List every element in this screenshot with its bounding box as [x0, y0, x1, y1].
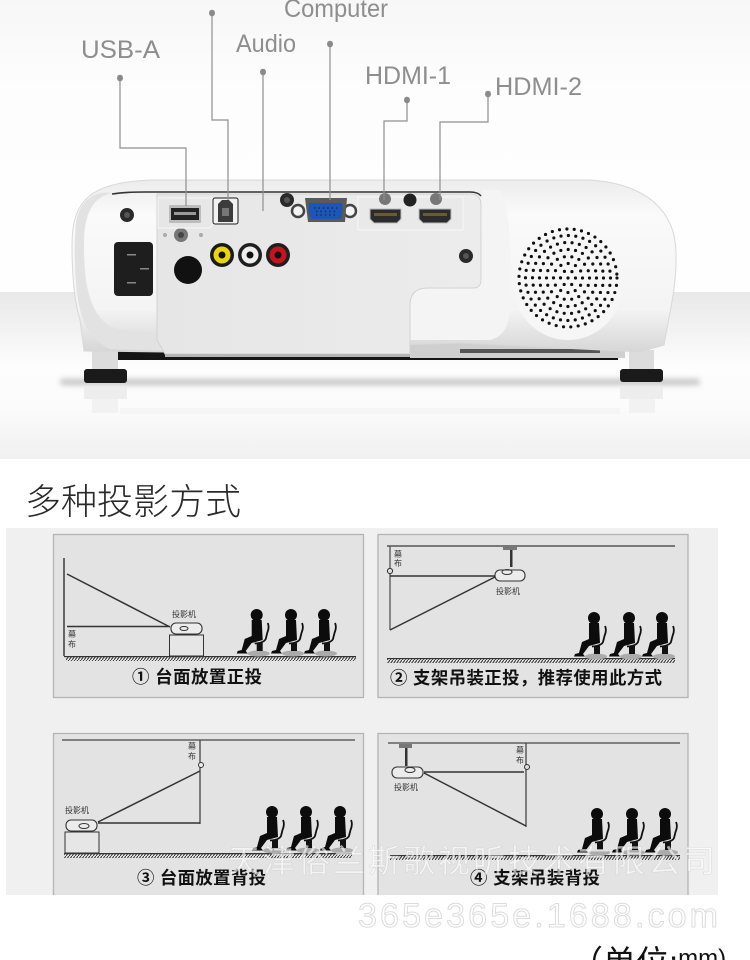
caption 1: ① 台面放置正投 — [132, 667, 262, 687]
screen label — [516, 745, 524, 765]
screen and beam — [64, 558, 170, 656]
leader lines — [117, 10, 491, 211]
label: USB-A: USB-A — [81, 36, 160, 64]
underside strip — [118, 340, 625, 360]
top edge shadow — [112, 192, 481, 196]
screen and beam — [424, 743, 530, 827]
projector feet — [84, 350, 663, 383]
USB-A port — [158, 198, 212, 228]
screen label: 幕 — [188, 741, 196, 751]
screen label: 幕 — [516, 745, 524, 755]
audience — [252, 806, 353, 854]
power inlet — [114, 242, 153, 296]
screws — [120, 193, 473, 263]
backdrop wall — [0, 0, 750, 292]
label: HDMI-1: HDMI-1 — [365, 62, 451, 90]
projector on table — [170, 609, 204, 656]
screen label: 布 — [188, 751, 196, 761]
screen label — [394, 549, 402, 568]
projector on table: 投影机 — [172, 609, 196, 619]
floor shadow — [60, 379, 700, 385]
floor reflection — [84, 387, 663, 414]
screen label — [188, 741, 196, 761]
screen label: 幕 — [68, 629, 76, 639]
audience — [574, 612, 675, 660]
diagram section background — [6, 528, 718, 895]
back plate — [157, 194, 481, 354]
VGA port — [292, 198, 356, 222]
projector — [72, 180, 676, 383]
side band — [410, 190, 510, 340]
projector on table — [65, 805, 99, 853]
ceiling projector: 投影机 — [496, 586, 520, 596]
heading: 多种投影方式 — [25, 481, 241, 522]
screen label: 布 — [68, 639, 76, 649]
ceiling — [62, 739, 355, 741]
left frame band — [75, 192, 165, 351]
screen label: 布 — [516, 755, 524, 765]
screen label: 布 — [394, 558, 402, 568]
ceiling projector: 投影机 — [394, 782, 418, 792]
speaker grille — [514, 229, 622, 340]
watermark: company name: 天津俗兰斯歌视听技术有限公司 — [228, 843, 715, 879]
caption 2: ② 支架吊装正投，推荐使用此方式 — [390, 668, 662, 688]
black plug — [174, 256, 202, 284]
ceiling — [387, 545, 675, 547]
projector on table: 投影机 — [65, 805, 89, 815]
screen and beam — [98, 740, 204, 824]
floor — [64, 853, 352, 858]
ceiling projector — [495, 546, 525, 596]
screen label — [68, 629, 76, 649]
HDMI ports — [358, 193, 463, 230]
screen label: 幕 — [394, 549, 402, 559]
floor — [390, 855, 680, 860]
bottom dark line — [165, 354, 410, 357]
audience — [237, 609, 337, 656]
ceiling projector — [392, 744, 423, 792]
panel 3: table rear projection — [54, 734, 364, 895]
panel 4: ceiling rear projection — [378, 734, 688, 895]
ceiling — [388, 742, 680, 744]
caption 4: ④ 支架吊装背投 — [470, 868, 600, 888]
floor — [64, 656, 356, 661]
projector shell — [72, 180, 676, 352]
RCA jacks — [210, 243, 290, 267]
panel 2: ceiling front projection — [378, 534, 688, 698]
label: Audio: Audio — [236, 30, 296, 58]
screen and beam — [387, 546, 495, 630]
backdrop floor — [0, 292, 750, 459]
caption 3: ③ 台面放置背投 — [137, 868, 266, 888]
USB-B port — [213, 198, 238, 224]
watermark: website: 365e365e.1688.com — [358, 897, 718, 935]
audience — [577, 808, 678, 856]
label: HDMI-2: HDMI-2 — [495, 73, 582, 101]
floor — [387, 658, 675, 663]
panel 1: table front projection — [54, 534, 364, 698]
